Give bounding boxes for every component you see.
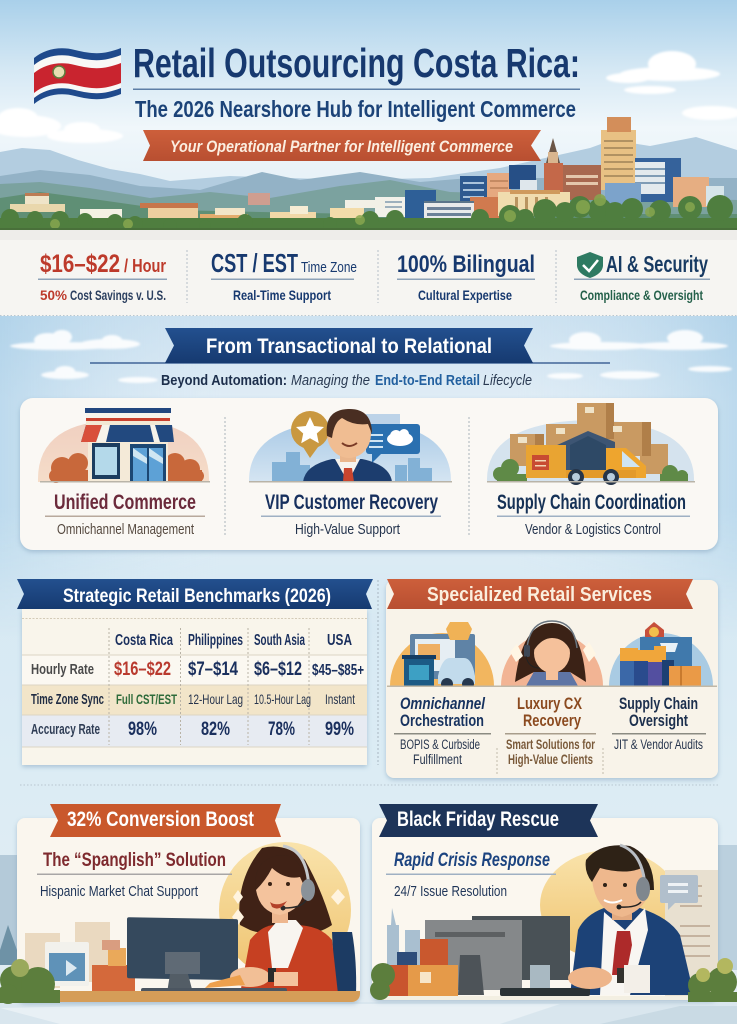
service: omnichannel orchestration: Omnichannel bbox=[400, 694, 486, 713]
mountains mid bbox=[0, 170, 737, 232]
icon: luxury CX agent bbox=[501, 620, 603, 686]
text: spanglish solution bbox=[37, 850, 232, 900]
stat: hourly rate: $16–$22 bbox=[40, 250, 120, 278]
forest band bbox=[0, 192, 737, 232]
ribbon: black friday rescue bbox=[379, 804, 598, 837]
ribbon: 32% conversion boost: 32% Conversion Boost bbox=[67, 808, 254, 831]
text: rapid crisis response: 24/7 Issue Resolution bbox=[394, 883, 507, 900]
stat: hourly rate: / Hour bbox=[124, 256, 166, 276]
row: accuracy rate: 82% bbox=[201, 719, 230, 740]
icon: bushes right bbox=[370, 958, 737, 1002]
row: hourly rate: $6–$12 bbox=[254, 659, 302, 680]
table header: USA bbox=[327, 632, 352, 649]
panel: retail lifecycle: Vendor & Logistics Control bbox=[525, 522, 661, 538]
row: hourly rate: $16–$22 bbox=[114, 659, 171, 680]
stat: time zone: Time Zone bbox=[301, 259, 357, 276]
row: hourly rate: $7–$14 bbox=[188, 659, 238, 680]
stat: bilingual bbox=[397, 251, 535, 303]
row: accuracy rate: 99% bbox=[325, 719, 354, 740]
service: luxury CX recovery: Recovery bbox=[523, 711, 581, 730]
stat: hourly rate bbox=[38, 250, 167, 303]
icon: storefront bbox=[38, 408, 209, 483]
header scene bbox=[0, 0, 737, 233]
row: accuracy rate: 98% bbox=[128, 719, 157, 740]
text: spanglish solution: Hispanic Market Chat Support bbox=[40, 883, 199, 900]
service: supply chain oversight bbox=[612, 694, 706, 752]
row: hourly rate: Hourly Rate bbox=[31, 661, 94, 678]
icon: Costa Rica flag bbox=[34, 48, 121, 104]
row: accuracy rate: 78% bbox=[268, 719, 295, 740]
panel: conversion boost case bbox=[17, 804, 360, 1002]
section subtitle: Managing the bbox=[291, 372, 370, 389]
background: bottom strip bbox=[0, 845, 737, 1024]
stat: hourly rate: Cost Savings v. U.S. bbox=[70, 287, 166, 303]
banner: strategic retail benchmarks: Strategic Retail Benchmarks (2026) bbox=[63, 586, 331, 607]
text: rapid crisis response bbox=[386, 850, 556, 900]
trees bbox=[0, 195, 737, 233]
service: luxury CX recovery bbox=[505, 694, 596, 767]
service: omnichannel orchestration: Orchestration bbox=[400, 711, 484, 730]
stat: hourly rate: 50% bbox=[40, 287, 68, 303]
section subtitle: End-to-End Retail bbox=[375, 372, 480, 389]
service: omnichannel orchestration bbox=[394, 694, 491, 767]
ribbon: 32% conversion boost bbox=[50, 804, 281, 837]
stat: bilingual: 100% Bilingual bbox=[397, 251, 535, 278]
row: time zone sync: Instant bbox=[325, 691, 355, 707]
illustration: agent with headset bbox=[25, 842, 360, 1002]
stat: time zone: Real-Time Support bbox=[233, 287, 331, 303]
clouds bbox=[10, 330, 732, 383]
row: hourly rate bbox=[31, 659, 364, 680]
mountains far bbox=[0, 137, 737, 232]
service: luxury CX recovery: High-Value Clients bbox=[508, 752, 593, 767]
table header: South Asia bbox=[254, 632, 305, 649]
tagline ribbon: Your Operational Partner for Intelligent Commerce bbox=[170, 137, 513, 156]
text: spanglish solution: The “Spanglish” Solution bbox=[43, 850, 226, 871]
row: time zone sync bbox=[31, 691, 355, 708]
section heading: from transactional to relational bbox=[90, 328, 610, 364]
tagline ribbon bbox=[143, 130, 541, 161]
ribbon: black friday rescue: Black Friday Rescue bbox=[397, 808, 559, 831]
icon: supply chain oversight bbox=[609, 622, 713, 686]
row: time zone sync: Time Zone Sync bbox=[31, 691, 104, 708]
section subtitle: Beyond Automation: bbox=[161, 372, 287, 389]
row: hourly rate: $45–$85+ bbox=[312, 662, 364, 679]
icon: omnichannel bbox=[390, 622, 494, 686]
panel: black friday case bbox=[372, 804, 720, 1000]
service: omnichannel orchestration: Fulfillment bbox=[413, 752, 462, 767]
service: supply chain oversight: JIT & Vendor Audits bbox=[614, 737, 703, 752]
service: luxury CX recovery: Smart Solutions for bbox=[506, 737, 596, 752]
stat: time zone bbox=[211, 248, 357, 303]
banner: specialized retail services bbox=[387, 579, 693, 609]
row: accuracy rate: Accuracy Rate bbox=[31, 721, 100, 738]
text: rapid crisis response: Rapid Crisis Response bbox=[394, 850, 550, 871]
service: supply chain oversight: Supply Chain bbox=[619, 694, 698, 713]
row: time zone sync: Full CST/EST bbox=[116, 691, 177, 707]
panel: specialized retail services bbox=[386, 579, 718, 778]
text: VIP customer recovery: VIP Customer Recovery bbox=[265, 491, 438, 514]
panel: benchmarks table bbox=[22, 609, 367, 765]
icon: supply chain bbox=[487, 403, 694, 485]
subtitle: The 2026 Nearshore Hub for Intelligent Commerce bbox=[135, 96, 576, 122]
panel: retail lifecycle bbox=[20, 398, 718, 550]
illustration: male agent bbox=[372, 845, 720, 1000]
lower background bbox=[0, 316, 737, 622]
service: omnichannel orchestration: BOPIS & Curbside bbox=[400, 737, 480, 752]
title: Retail Outsourcing Costa Rica: bbox=[133, 40, 580, 86]
mountains near bbox=[0, 180, 737, 232]
panel: retail lifecycle: High-Value Support bbox=[295, 522, 400, 538]
key stats band bbox=[0, 230, 737, 316]
panel: retail lifecycle: Omnichannel Management bbox=[57, 522, 194, 538]
table header: Costa Rica bbox=[115, 632, 173, 649]
banner: specialized retail services: Specialized Retail Services bbox=[427, 584, 652, 606]
service: supply chain oversight: Oversight bbox=[629, 711, 688, 730]
icon: VIP agent bbox=[249, 409, 451, 482]
clouds bbox=[0, 51, 737, 143]
stat: time zone: CST / EST bbox=[211, 248, 298, 278]
icon: bush left bbox=[0, 959, 60, 1004]
row: time zone sync: 10.5-Hour Lag bbox=[254, 691, 311, 707]
banner: strategic retail benchmarks bbox=[17, 579, 373, 609]
section heading: from transactional to relational: From Transactional to Relational bbox=[206, 335, 492, 358]
table header: Philippines bbox=[188, 632, 243, 649]
row: time zone sync: 12-Hour Lag bbox=[188, 691, 243, 707]
city skyline bbox=[10, 117, 724, 226]
service: luxury CX recovery: Luxury CX bbox=[517, 694, 582, 713]
stat: bilingual: Cultural Expertise bbox=[418, 287, 512, 303]
section subtitle: Lifecycle bbox=[483, 372, 532, 389]
stat: AI and security bbox=[574, 251, 710, 303]
table header bbox=[115, 632, 352, 649]
row: accuracy rate bbox=[31, 719, 354, 740]
text: unified commerce: Unified Commerce bbox=[54, 491, 196, 514]
